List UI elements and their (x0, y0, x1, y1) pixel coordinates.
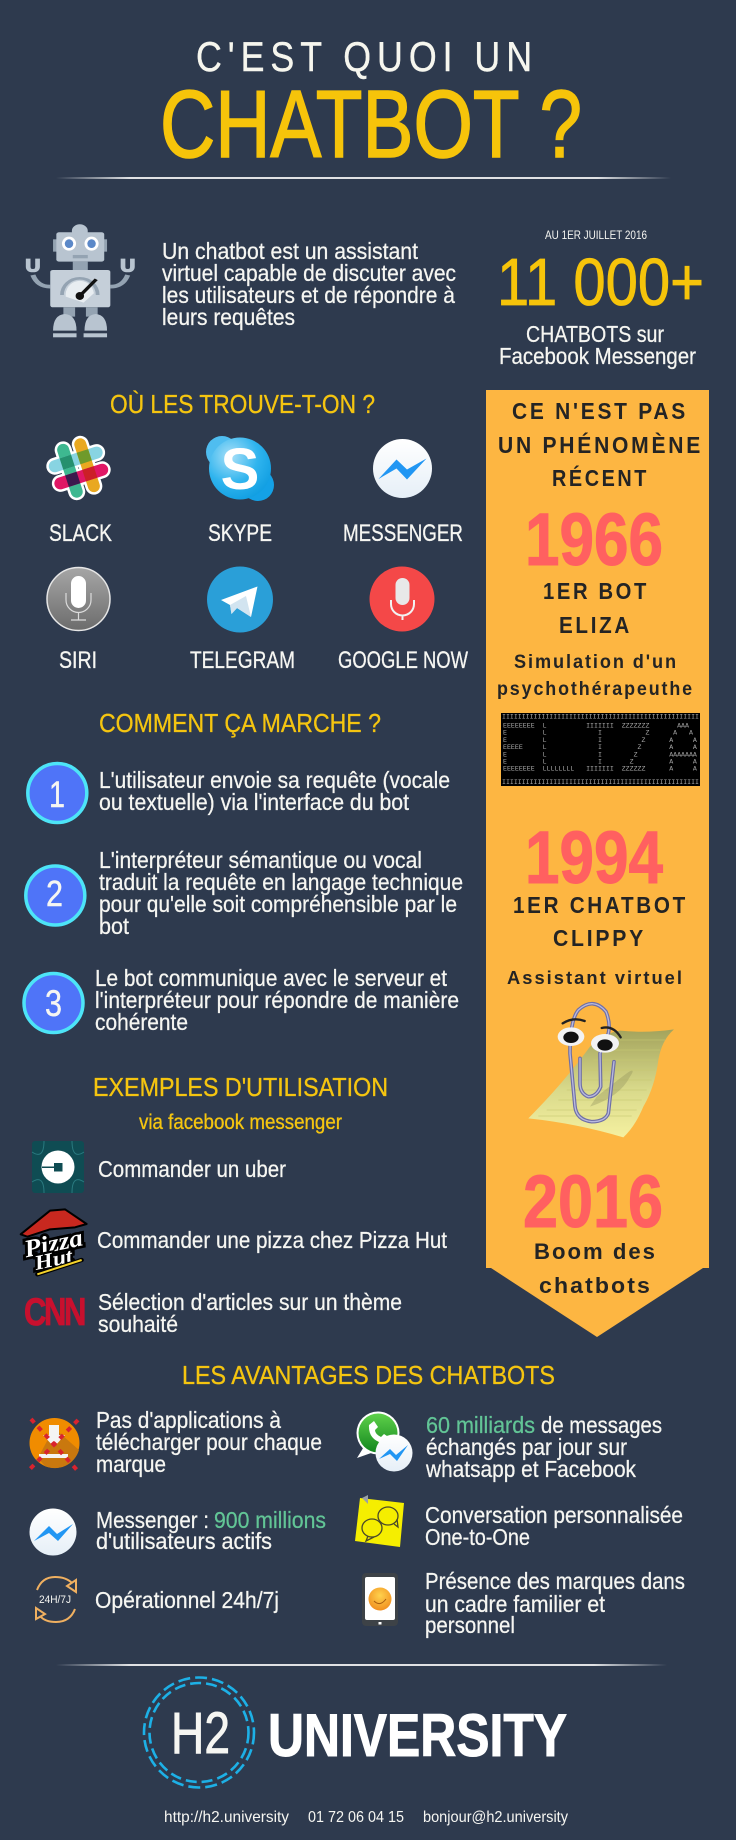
clippy caption: CLIPPY (553, 925, 646, 951)
label: siri: SIRI (59, 647, 97, 674)
footer contacts (164, 1809, 568, 1826)
stat: 11 000+ chatbots: Facebook Messenger (499, 343, 696, 369)
text: whatsapp stat (425, 1412, 662, 1482)
eliza terminal screenshot: IIIIIIIIIIIIIIIIIIIIIIIIIIIIIIIIIIIIIIIIIIIIIIIIII (502, 779, 699, 786)
label: google now: GOOGLE NOW (338, 647, 468, 674)
heading: COMMENT ÇA MARCHE ? (99, 708, 381, 738)
eliza terminal screenshot: EEEEE L I Z A A (503, 744, 697, 751)
step 2 badge (26, 866, 85, 925)
step 3 text: Le bot communique avec le serveur et (95, 965, 448, 991)
illustration: clippy (528, 1004, 674, 1137)
text: pizza hut: Commander une pizza chez Pizza Hut (97, 1227, 448, 1253)
eliza terminal screenshot: IIIIIIIIIIIIIIIIIIIIIIIIIIIIIIIIIIIIIIIIIIIIIIIIII (502, 714, 699, 720)
text: whatsapp stat: whatsapp et Facebook (425, 1456, 636, 1482)
title (160, 33, 582, 178)
text: phone: Présence des marques dans (425, 1568, 685, 1594)
heading: via facebook messenger (139, 1111, 342, 1134)
stat: 11 000+ chatbots: 11 000+ (497, 245, 704, 320)
icon: whatsapp and messenger (356, 1412, 412, 1472)
text: phone: un cadre familier et (425, 1591, 606, 1617)
eliza caption: ELIZA (559, 612, 632, 638)
clippy caption: 1ER CHATBOT (513, 892, 688, 918)
eliza caption: psychothérapeuthe (497, 679, 694, 700)
icon: uber (32, 1141, 84, 1193)
text: no download: Pas d'applications à (96, 1407, 281, 1433)
ribbon heading (498, 398, 703, 491)
text: messenger stat: Messenger : (96, 1507, 209, 1533)
eliza terminal screenshot: E L I Z A A (503, 758, 697, 766)
text: no download: marque (96, 1451, 166, 1477)
title line 1: C'EST QUOI UN (196, 33, 538, 80)
icon: no download (29, 1418, 80, 1470)
ribbon heading: UN PHÉNOMÈNE (498, 431, 703, 458)
title line 2: CHATBOT ? (160, 71, 582, 178)
text: sticky note: One-to-One (425, 1524, 530, 1550)
step 3 badge (24, 974, 83, 1032)
eliza caption: 1ER BOT (543, 578, 649, 604)
text: sticky note: Conversation personnalisée (425, 1502, 683, 1528)
icon: sticky note (355, 1495, 404, 1547)
step 3 text (95, 965, 459, 1035)
panel: timeline ribbon (486, 390, 709, 1337)
step 3 text: l'interpréteur pour répondre de manière (95, 987, 459, 1013)
stat: 11 000+ chatbots: AU 1ER JUILLET 2016 (545, 230, 647, 242)
panel: les avantages des chatbots (29, 1360, 685, 1638)
eliza terminal screenshot: E L I Z A A (503, 737, 697, 744)
panel: où les trouve-t-on (47, 389, 468, 674)
heading (93, 1072, 388, 1134)
ribbon shape (486, 390, 709, 1337)
text: cnn: souhaité (98, 1311, 178, 1337)
text: whatsapp stat: échangés par jour sur (426, 1434, 627, 1460)
text: cnn: Sélection d'articles sur un thème (98, 1289, 402, 1315)
label: telegram: TELEGRAM (190, 647, 295, 674)
logo rings (144, 1678, 254, 1788)
icon: messenger small (30, 1508, 76, 1556)
step 2 text: pour qu'elle soit compréhensible par le (99, 891, 457, 917)
text: messenger stat: 900 millions (214, 1507, 326, 1533)
text: phone (425, 1568, 685, 1638)
year 1994: 1994 (525, 816, 663, 899)
eliza caption: Simulation d'un (514, 652, 678, 673)
step 3 badge: 3 (45, 983, 62, 1024)
boom caption: Boom des (534, 1239, 657, 1264)
eliza terminal screenshot (501, 713, 700, 786)
icon: 24h/7j (36, 1577, 76, 1622)
text: uber: Commander un uber (98, 1156, 286, 1182)
intro text: virtuel capable de discuter avec (162, 260, 456, 286)
year 1966: 1966 (525, 498, 663, 581)
text: cnn (98, 1289, 402, 1337)
text: no download (96, 1407, 322, 1477)
icon: cnn: CNN (24, 1291, 85, 1334)
footer contacts: http://h2.university (164, 1809, 289, 1826)
heading: EXEMPLES D'UTILISATION (93, 1072, 388, 1102)
step 3 text: cohérente (95, 1009, 188, 1035)
step 2 text: bot (99, 913, 130, 939)
intro text: les utilisateurs et de répondre à (162, 282, 455, 308)
footer contacts: bonjour@h2.university (423, 1809, 568, 1826)
label: skype: SKYPE (208, 520, 272, 547)
year 2016: 2016 (523, 1160, 663, 1243)
logo h2: H2 (171, 1701, 230, 1766)
footer contacts: 01 72 06 04 15 (308, 1809, 404, 1826)
icon: robot (28, 224, 132, 337)
eliza terminal screenshot: EEEEEEEE LLLLLLLL IIIIIII ZZZZZZ A A (503, 766, 697, 773)
eliza terminal screenshot: E L I Z A A (503, 730, 693, 737)
step 2 text: traduit la requête en langage technique (99, 869, 463, 895)
text: messenger stat: d'utilisateurs actifs (96, 1528, 272, 1554)
boom caption (534, 1239, 657, 1298)
text: messenger stat (96, 1507, 326, 1554)
icon: pizza hut: Pizza (21, 1224, 85, 1263)
icon: siri (47, 568, 110, 630)
icon: pizza hut (21, 1209, 87, 1275)
text: sticky note (425, 1502, 683, 1550)
heading: LES AVANTAGES DES CHATBOTS (182, 1360, 555, 1390)
eliza terminal screenshot: E L I Z AAAAAAA (503, 751, 697, 758)
text: phone: personnel (425, 1612, 515, 1638)
ribbon heading: RÉCENT (552, 464, 649, 491)
text: no download: télécharger pour chaque (96, 1429, 322, 1455)
ribbon heading: CE N'EST PAS (512, 398, 688, 424)
panel: comment ça marche (24, 708, 463, 1035)
logo wordmark: UNIVERSITY (268, 1702, 567, 1769)
label: slack: SLACK (49, 520, 112, 547)
intro text: leurs requêtes (162, 304, 295, 330)
eliza caption (497, 578, 694, 700)
text: 24h/7j: Opérationnel 24h/7j (95, 1587, 279, 1613)
stat: 11 000+ chatbots: CHATBOTS sur (526, 321, 664, 347)
eliza terminal screenshot: EEEEEEEE L IIIIIII ZZZZZZZ AAA (503, 722, 689, 730)
step 1 text: ou textuelle) via l'interface du bot (99, 789, 410, 815)
text: whatsapp stat: 60 milliards (426, 1412, 535, 1438)
icon: telegram (207, 566, 273, 632)
heading: OÙ LES TROUVE-T-ON ? (110, 389, 375, 419)
intro text (162, 238, 456, 330)
footer logo: h2 university (144, 1678, 567, 1788)
icon: phone with smiley (362, 1573, 398, 1626)
icon: pizza hut: Hut (31, 1245, 76, 1275)
step 2 text: L'interpréteur sémantique ou vocal (99, 847, 422, 873)
icon: messenger (373, 439, 432, 498)
step 2 badge: 2 (46, 873, 63, 914)
intro text: Un chatbot est un assistant (162, 238, 419, 264)
step 1 text (99, 767, 450, 815)
step 2 text (99, 847, 463, 939)
step 1 badge (28, 764, 87, 822)
clippy caption: Assistant virtuel (507, 968, 684, 988)
label: messenger: MESSENGER (343, 520, 463, 547)
panel: exemples d'utilisation (21, 1072, 448, 1337)
step 1 text: L'utilisateur envoie sa requête (vocale (99, 767, 450, 793)
icon: google now (370, 566, 434, 632)
stat: 11 000+ chatbots (497, 230, 704, 369)
text: whatsapp stat: de messages (541, 1412, 662, 1438)
icon: slack (51, 440, 106, 496)
boom caption: chatbots (539, 1273, 652, 1298)
icon: 24h/7j: 24H/7J (39, 1594, 71, 1606)
icon: skype (206, 436, 274, 502)
clippy caption (507, 892, 688, 988)
step 1 badge: 1 (49, 774, 65, 815)
icon: skype: S (221, 437, 259, 502)
